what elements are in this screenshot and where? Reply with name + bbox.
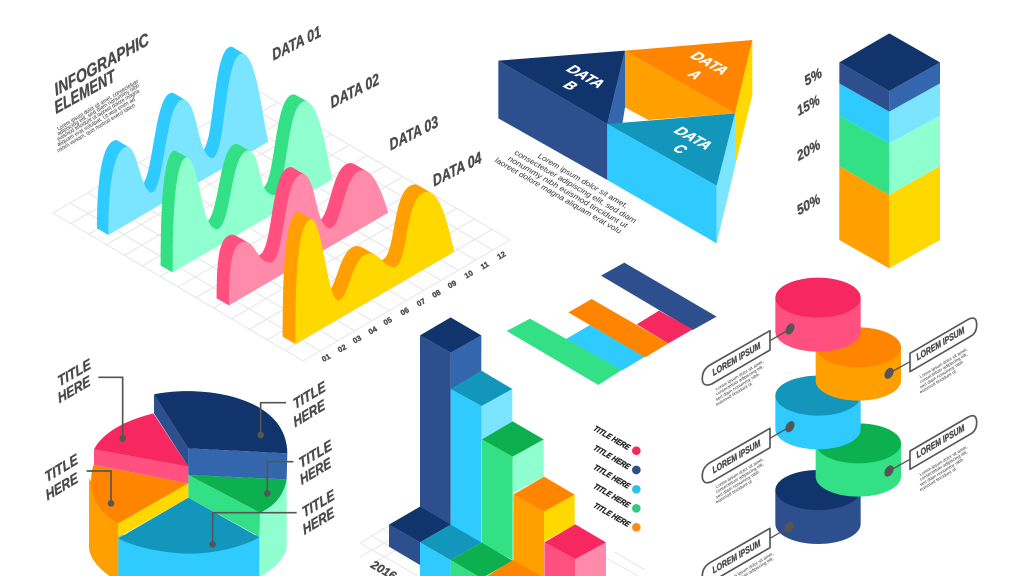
legend: title here: TITLE HERE [591,502,633,529]
callout: right one: LOREM IPSUM [915,325,966,363]
axis labels 01 to 12: 12 [495,249,507,262]
axis labels 01 to 12: 10 [463,268,475,281]
cylinder: cyan [775,376,861,449]
callout: left two: LOREM IPSUM [711,438,762,476]
text block: intro paragraph: Lorem ipsum dolor sit amet, consectetuer [56,79,140,132]
triangle segment labels: A [683,68,707,82]
percentage labels: 50% [795,191,822,218]
chart floor grid [53,92,510,361]
pie title labels: TITLE [43,451,80,486]
cylinder: green [816,423,901,497]
cylinder: pink [775,278,861,352]
series labels: DATA 03 [388,113,440,155]
wave series: data 01 [97,47,268,235]
callout: right one [883,318,977,395]
callout: left one: euismod tincidunt ut [715,381,754,407]
pie title labels: TITLE [292,378,328,413]
callout: right two: LOREM IPSUM [915,422,966,460]
callout: right one: sed diam nonummy nibh [919,359,965,390]
callout: left one [702,322,796,407]
axis labels 01 to 12: 01 [320,351,333,364]
wave series: data 03 [217,163,388,305]
percentage labels [794,65,824,218]
legend: title here: TITLE HERE [591,463,633,490]
text block: intro paragraph: aliquam erat volutpat. Ut wisi enim ad [56,97,137,148]
percentage labels: 20% [794,136,822,164]
axis labels 01 to 12: 08 [430,287,443,300]
callout: right two: sed diam nonummy nibh [919,457,965,487]
callout: left two [702,419,796,505]
callout: right two: Lorem ipsum dolor sit amet, [919,444,968,477]
series labels: DATA 01 [271,23,323,65]
heading: infographic element: INFOGRAPHIC [52,29,151,100]
legend: title here: TITLE HERE [591,482,633,509]
pie title labels: HERE [44,470,80,505]
percentage labels: 15% [795,92,822,119]
pie title labels: HERE [301,504,337,539]
callout: left one: Lorem ipsum dolor sit amet, [715,359,764,392]
callout: left two: Lorem ipsum dolor sit amet, [715,457,764,489]
axis labels 01 to 12: 09 [446,278,458,291]
triangle segment labels: C [668,143,691,156]
panel: isometric wave chart [53,23,510,364]
pie title labels: HERE [298,455,333,489]
pie title labels: TITLE [297,437,334,472]
text block: triangle caption [493,148,638,236]
pie title labels: HERE [292,397,327,431]
pie title labels: TITLE [301,487,337,522]
axis labels 01 to 12: 07 [415,296,427,309]
axis labels 01 to 12: 04 [367,324,379,337]
pie title labels [43,356,337,539]
callout: left one: consectetuer adipiscing elit, [715,364,764,397]
isometric columns [389,317,606,576]
pie title labels: HERE [56,373,93,407]
triangle segment labels: DATA [669,125,717,152]
text block: intro paragraph: euismod tincidunt ut laoreet dolore magna [56,88,141,143]
callout: left three: LOREM IPSUM [711,538,762,576]
text block: triangle caption: consectetuer adipiscing elit, sed diam [513,148,638,226]
callout: left three [702,520,795,576]
callout: left two: euismod tincidunt ut [715,478,754,505]
text block: triangle caption: nonummy nibh euismod tincidunt ut [506,154,630,231]
panel: 3D pie chart [43,356,337,576]
pie leader lines and dots [87,377,297,544]
callout: left one: sed diam nonummy nibh [715,371,761,402]
column chart floor grid [360,524,645,576]
wave series: data 04 [283,184,454,344]
panel: isometric column chart [360,317,645,576]
axis labels 01 to 12: 06 [399,305,411,318]
axis labels 01 to 12 [320,249,507,364]
legend: title here: TITLE HERE [591,444,633,471]
axis labels 01 to 12: 02 [336,342,348,355]
triangle segment labels: DATA [685,50,733,77]
callout: right two: consectetuer adipiscing elit, [919,449,968,482]
triangle segment labels: B [558,79,581,93]
triangle segment labels: DATA [561,63,609,91]
callout: right two [883,416,977,492]
series labels [271,23,484,191]
cylinder: navy [775,470,861,544]
wave series: data 02 [161,94,332,272]
panel: stacked percentage column [794,33,940,268]
axis labels 01 to 12: 05 [382,315,394,327]
text block: triangle caption: laoreet dolore magna aliquam erat volu [493,156,624,236]
callout: right one: euismod tincidunt ut [919,368,958,395]
panel: 3D triangle chart [498,40,752,243]
text block: intro paragraph: adipiscing elit, sed diam nonummy nibh [56,83,141,137]
callout: right one: Lorem ipsum dolor sit amet, [919,347,968,379]
callout: left one: LOREM IPSUM [711,340,762,378]
percentage labels: 5% [802,65,824,89]
legend: title here [591,425,641,532]
series labels: DATA 02 [329,71,381,112]
axis labels 01 to 12: 11 [479,259,491,271]
legend: title here: TITLE HERE [591,425,633,452]
callout: right one: consectetuer adipiscing elit, [919,352,968,384]
text block: intro paragraph: minim veniam, quis nostrud exerci tation [56,103,137,154]
text block: triangle caption: Lorem ipsum dolor sit amet, [536,151,629,210]
cylinder: orange [816,327,901,401]
axis labels 01 to 12: 03 [351,333,363,346]
heading: infographic element: ELEMENT [52,65,118,118]
series labels: DATA 04 [431,149,484,191]
callout: left two: consectetuer adipiscing elit, [715,462,764,494]
panel: isometric flat bars [507,263,717,385]
callout: right two: euismod tincidunt ut [919,466,958,492]
triangle segment labels [558,50,733,156]
callout: left two: sed diam nonummy nibh [715,469,761,500]
panel: stacked cylinders with callouts [702,278,977,576]
pie title labels: TITLE [56,356,93,391]
